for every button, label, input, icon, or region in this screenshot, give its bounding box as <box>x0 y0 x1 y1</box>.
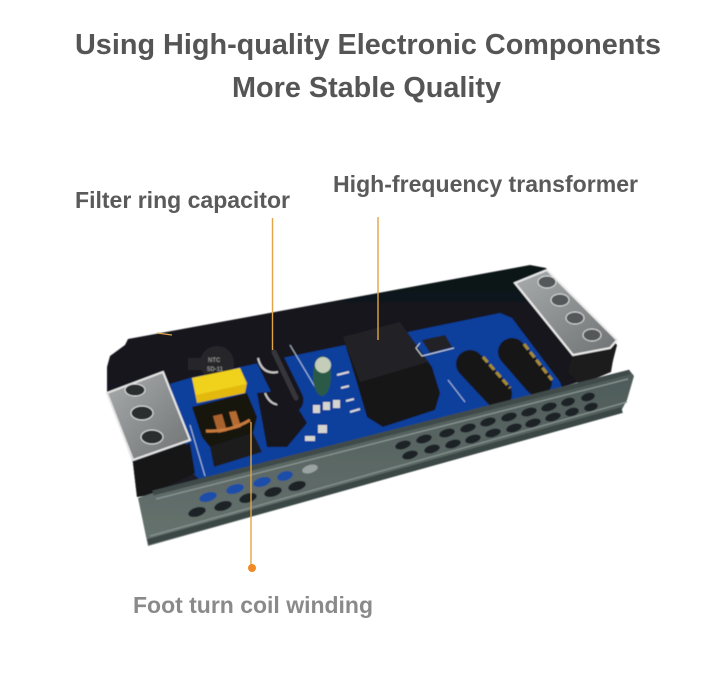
product photo: power supply <box>107 265 634 546</box>
circuit board <box>170 313 564 490</box>
leader line: high-frequency transformer <box>377 217 379 340</box>
front perforated rail <box>138 371 634 546</box>
yellow capacitor <box>192 368 247 403</box>
title: More Stable Quality <box>232 72 501 104</box>
right terminal block <box>515 270 617 385</box>
green capacitor <box>313 356 331 396</box>
leader line: foot turn coil winding <box>250 422 252 568</box>
transformer pins <box>337 372 360 412</box>
transformer block <box>343 322 440 427</box>
leader line: filter ring capacitor <box>272 218 274 350</box>
NTC thermistor <box>188 346 234 380</box>
small surface components <box>305 400 340 441</box>
rail holes upper row <box>198 391 596 504</box>
label: foot turn coil winding: Foot turn coil winding <box>133 592 373 618</box>
filter coil <box>192 393 262 467</box>
left terminal block <box>107 372 195 497</box>
NTC thermistor: 5D-11 <box>207 367 224 373</box>
label: high-frequency transformer: High-frequency transformer <box>333 171 638 197</box>
electrolytic capacitor 680uF left <box>470 357 510 394</box>
electrolytic capacitor 680uF right <box>512 344 552 382</box>
electrolytic capacitor lower <box>257 390 307 447</box>
board traces <box>190 345 465 476</box>
label: filter ring capacitor: Filter ring capacitor <box>75 187 290 213</box>
electrolytic capacitor upper <box>258 352 296 400</box>
MOSFET component <box>416 335 454 356</box>
leader dot: foot turn coil winding <box>248 564 256 572</box>
title <box>75 29 661 104</box>
title: Using High-quality Electronic Components <box>75 29 661 61</box>
NTC thermistor: NTC <box>208 358 221 364</box>
chassis back wall <box>107 265 617 497</box>
small leader tick <box>157 333 172 335</box>
rail holes lower row <box>187 401 599 519</box>
